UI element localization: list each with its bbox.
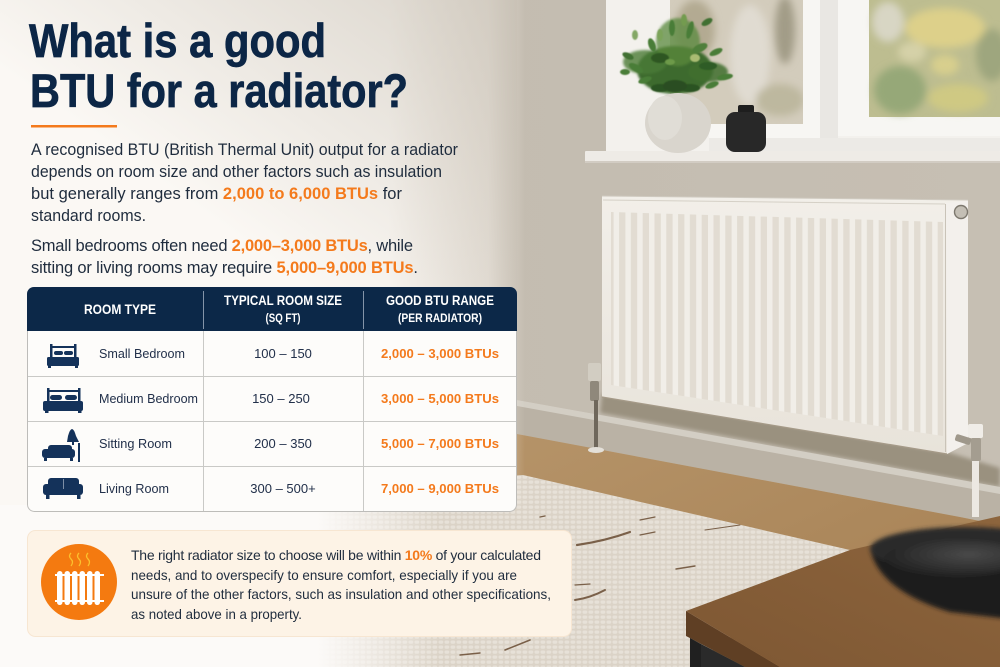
window surround [606,0,1000,152]
callout [28,530,572,636]
callout panel [28,530,572,636]
title: BTU for a radiator? [30,64,408,117]
window sill [585,151,1000,163]
intro text: but generally ranges from 2,000 to 6,000 BTUs for [31,185,402,203]
icon: sofa with lamp [42,429,80,462]
row labels: Sitting Room [99,436,172,451]
shadow under radiator [600,394,1000,487]
right radiator valve [954,424,983,517]
callout text: unsure of the other factors, such as insulation and other specifications, [131,586,551,602]
room sizes: 100 – 150 [254,346,312,361]
intro text: standard rooms. [31,207,146,225]
BTU ranges: 7,000 – 9,000 BTUs [381,481,499,496]
table body [28,288,516,512]
window left pane outdoor view [670,0,804,125]
BTU table [27,287,517,512]
icon: living room sofa [43,478,83,499]
title [29,14,408,117]
left radiator valve [588,363,604,453]
room sizes: 150 – 250 [252,391,310,406]
intro text: depends on room size and other factors such as insulation [31,163,442,181]
room sizes [250,346,316,496]
title underline [31,125,117,128]
header labels: GOOD BTU RANGE [386,293,494,308]
intro text: sitting or living rooms may require 5,000–9,000 BTUs. [31,259,418,277]
left white fade lower [0,505,440,667]
callout text: needs, and to overspecify to ensure comfort, especially if you are [131,567,517,583]
intro text: Small bedrooms often need 2,000–3,000 BTUs, while [31,237,413,255]
window right pane outdoor view [869,0,1000,117]
intro text: A recognised BTU (British Thermal Unit) output for a radiator [31,141,458,159]
room sizes: 200 – 350 [254,436,312,451]
intro text [31,141,458,277]
row labels: Living Room [99,481,169,496]
wooden floor [517,434,1000,667]
row labels: Small Bedroom [99,346,185,361]
BTU ranges: 5,000 – 7,000 BTUs [381,436,499,451]
header labels [84,293,494,325]
callout text: as noted above in a property. [131,606,302,622]
callout text: The right radiator size to choose will be within 10% of your calculated [131,547,541,563]
BTU ranges: 2,000 – 3,000 BTUs [381,346,499,361]
header labels: ROOM TYPE [84,302,156,317]
callout text [131,547,551,622]
title: What is a good [29,14,326,67]
icon: small bed [47,344,79,368]
left white fade upper [0,0,525,505]
top shading [0,0,517,290]
black bowl [870,527,1000,625]
plant in pot [620,14,733,153]
header labels: (SQ FT) [266,313,301,325]
header labels: TYPICAL ROOM SIZE [224,293,342,308]
row labels: Medium Bedroom [99,391,198,406]
radiator [602,196,968,454]
window frame [709,0,1000,151]
icon: medium bed [43,388,83,413]
skirting board [517,400,1000,525]
table header [27,287,517,331]
header labels: (PER RADIATOR) [398,313,482,325]
black vase [726,105,766,152]
icon: radiator with heat [41,544,117,620]
BTU ranges [381,346,499,496]
BTU ranges: 3,000 – 5,000 BTUs [381,391,499,406]
rug [0,475,850,667]
side table [686,516,1000,667]
row labels [99,346,198,496]
room sizes: 300 – 500+ [250,481,316,496]
